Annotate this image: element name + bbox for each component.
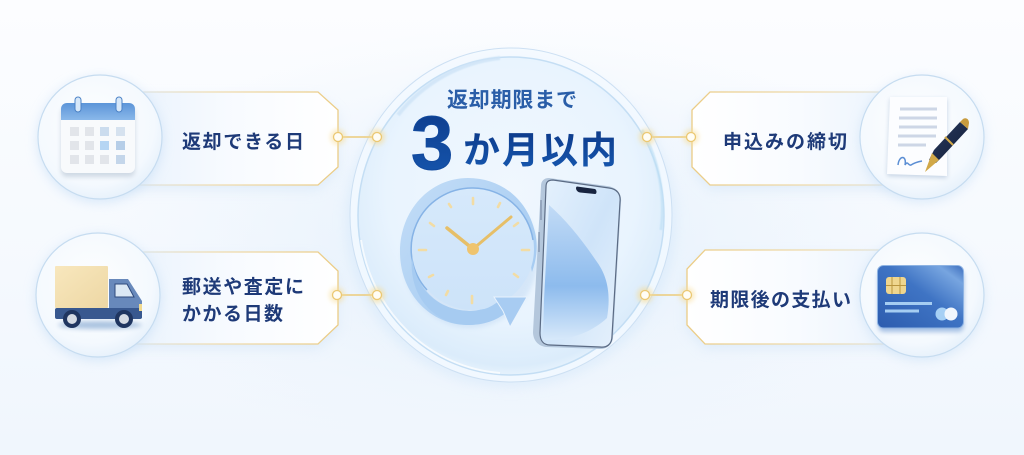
panel: 期限後の支払い <box>687 250 930 349</box>
panel: 返却できる日 <box>110 92 338 190</box>
label: 郵送や査定にかかる日数: 郵送や査定に <box>182 276 304 298</box>
heading: 3か月以内: か月以内 <box>463 130 617 171</box>
heading: 3か月以内 <box>411 101 617 186</box>
connectors <box>329 129 699 303</box>
icon: clock with arrow <box>400 178 538 328</box>
icon: document with pen <box>887 97 969 178</box>
label: 返却できる日: 返却できる日 <box>182 131 304 153</box>
connector: bottom left <box>329 287 385 303</box>
panel: 申込みの締切 <box>692 92 930 190</box>
label: 申込みの締切: 申込みの締切 <box>723 131 847 153</box>
central orb <box>346 48 676 387</box>
icon: truck <box>55 266 142 329</box>
panel: 郵送や査定にかかる日数 <box>110 252 338 349</box>
connector: bottom right <box>637 287 695 303</box>
icon: calendar <box>61 97 135 177</box>
label: 期限後の支払い: 期限後の支払い <box>710 289 851 311</box>
circle: document and pen icon <box>860 75 984 202</box>
circle: calendar icon <box>38 75 162 202</box>
heading: 3か月以内: 3 <box>411 101 453 186</box>
connector: top right <box>639 129 699 145</box>
heading: 返却期限まで: 返却期限まで <box>447 89 577 112</box>
circle: truck icon <box>36 233 160 360</box>
icon: smartphone <box>533 178 621 349</box>
label: 郵送や査定にかかる日数: かかる日数 <box>182 303 283 325</box>
circle: credit card icon <box>860 233 984 360</box>
icon: credit card <box>878 266 964 332</box>
connector: top left <box>330 129 385 145</box>
